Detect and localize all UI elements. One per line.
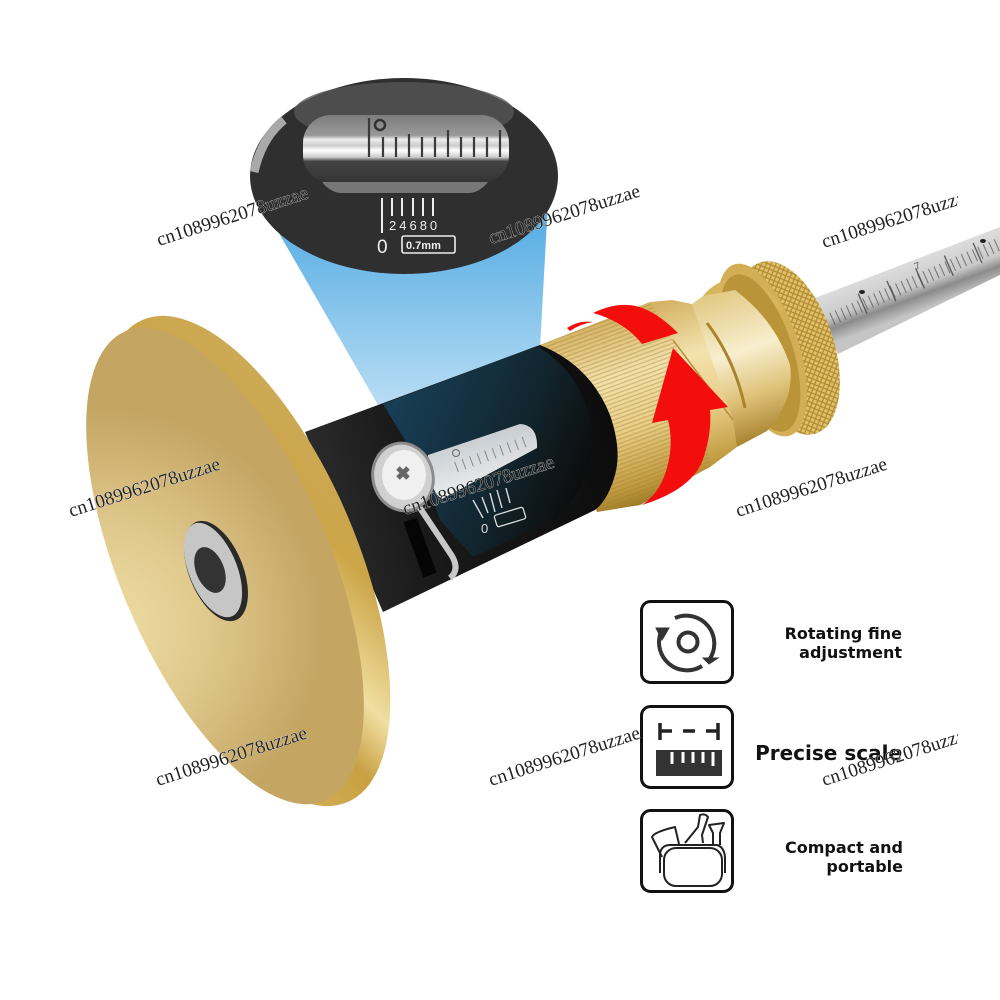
feature label: precise scale: Precise scale (755, 741, 902, 765)
watermarks: cn1089962078uzzae (819, 185, 976, 253)
rod with scale: 7 (913, 260, 923, 273)
magnified scale inset (250, 78, 558, 274)
red rotation arrow (567, 305, 728, 505)
feature label: compact and portable: Compact and (785, 838, 903, 857)
watermarks: cn1089962078uzzae (819, 723, 976, 791)
brass disc with rim (29, 276, 450, 846)
screw and steel clip (365, 436, 456, 578)
watermarks: cn1089962078uzzae (154, 183, 311, 251)
feature label: compact and portable (785, 838, 903, 876)
watermarks: cn1089962078uzzae (66, 454, 223, 522)
icon: precise scale (642, 706, 732, 788)
icon: rotating fine adjustment (642, 602, 732, 682)
brass knurled sleeve (540, 300, 737, 512)
watermarks (66, 181, 976, 791)
blue projection beam (276, 202, 548, 412)
rod with scale (815, 227, 1000, 354)
engraved marks (382, 198, 433, 233)
window scale cylinder and engraved marks: 0 (481, 521, 488, 536)
magnified scale inset: 0.7mm (406, 240, 441, 252)
window scale cylinder and engraved marks (428, 424, 537, 536)
watermarks: cn1089962078uzzae (400, 452, 557, 520)
watermarks: cn1089962078uzzae (153, 723, 310, 791)
magnified scale inset: 24680 (389, 218, 440, 233)
feature label: rotating fine adjustment: adjustment (799, 643, 902, 662)
watermarks: cn1089962078uzzae (733, 454, 890, 522)
black cylinder body (305, 345, 618, 612)
feature label: rotating fine adjustment: Rotating fine (785, 624, 902, 643)
scale ticks (369, 118, 500, 157)
disc centre hub (171, 512, 261, 630)
magnified scale inset: 0 (377, 237, 388, 258)
feature label: compact and portable: portable (826, 857, 903, 876)
feature label: rotating fine adjustment (785, 624, 902, 662)
watermarks: cn1089962078uzzae (486, 723, 643, 791)
icon: compact bag (642, 810, 732, 892)
brass neck and knurled cap (692, 248, 860, 448)
watermarks: cn1089962078uzzae (486, 181, 643, 249)
translucent window (383, 346, 593, 557)
